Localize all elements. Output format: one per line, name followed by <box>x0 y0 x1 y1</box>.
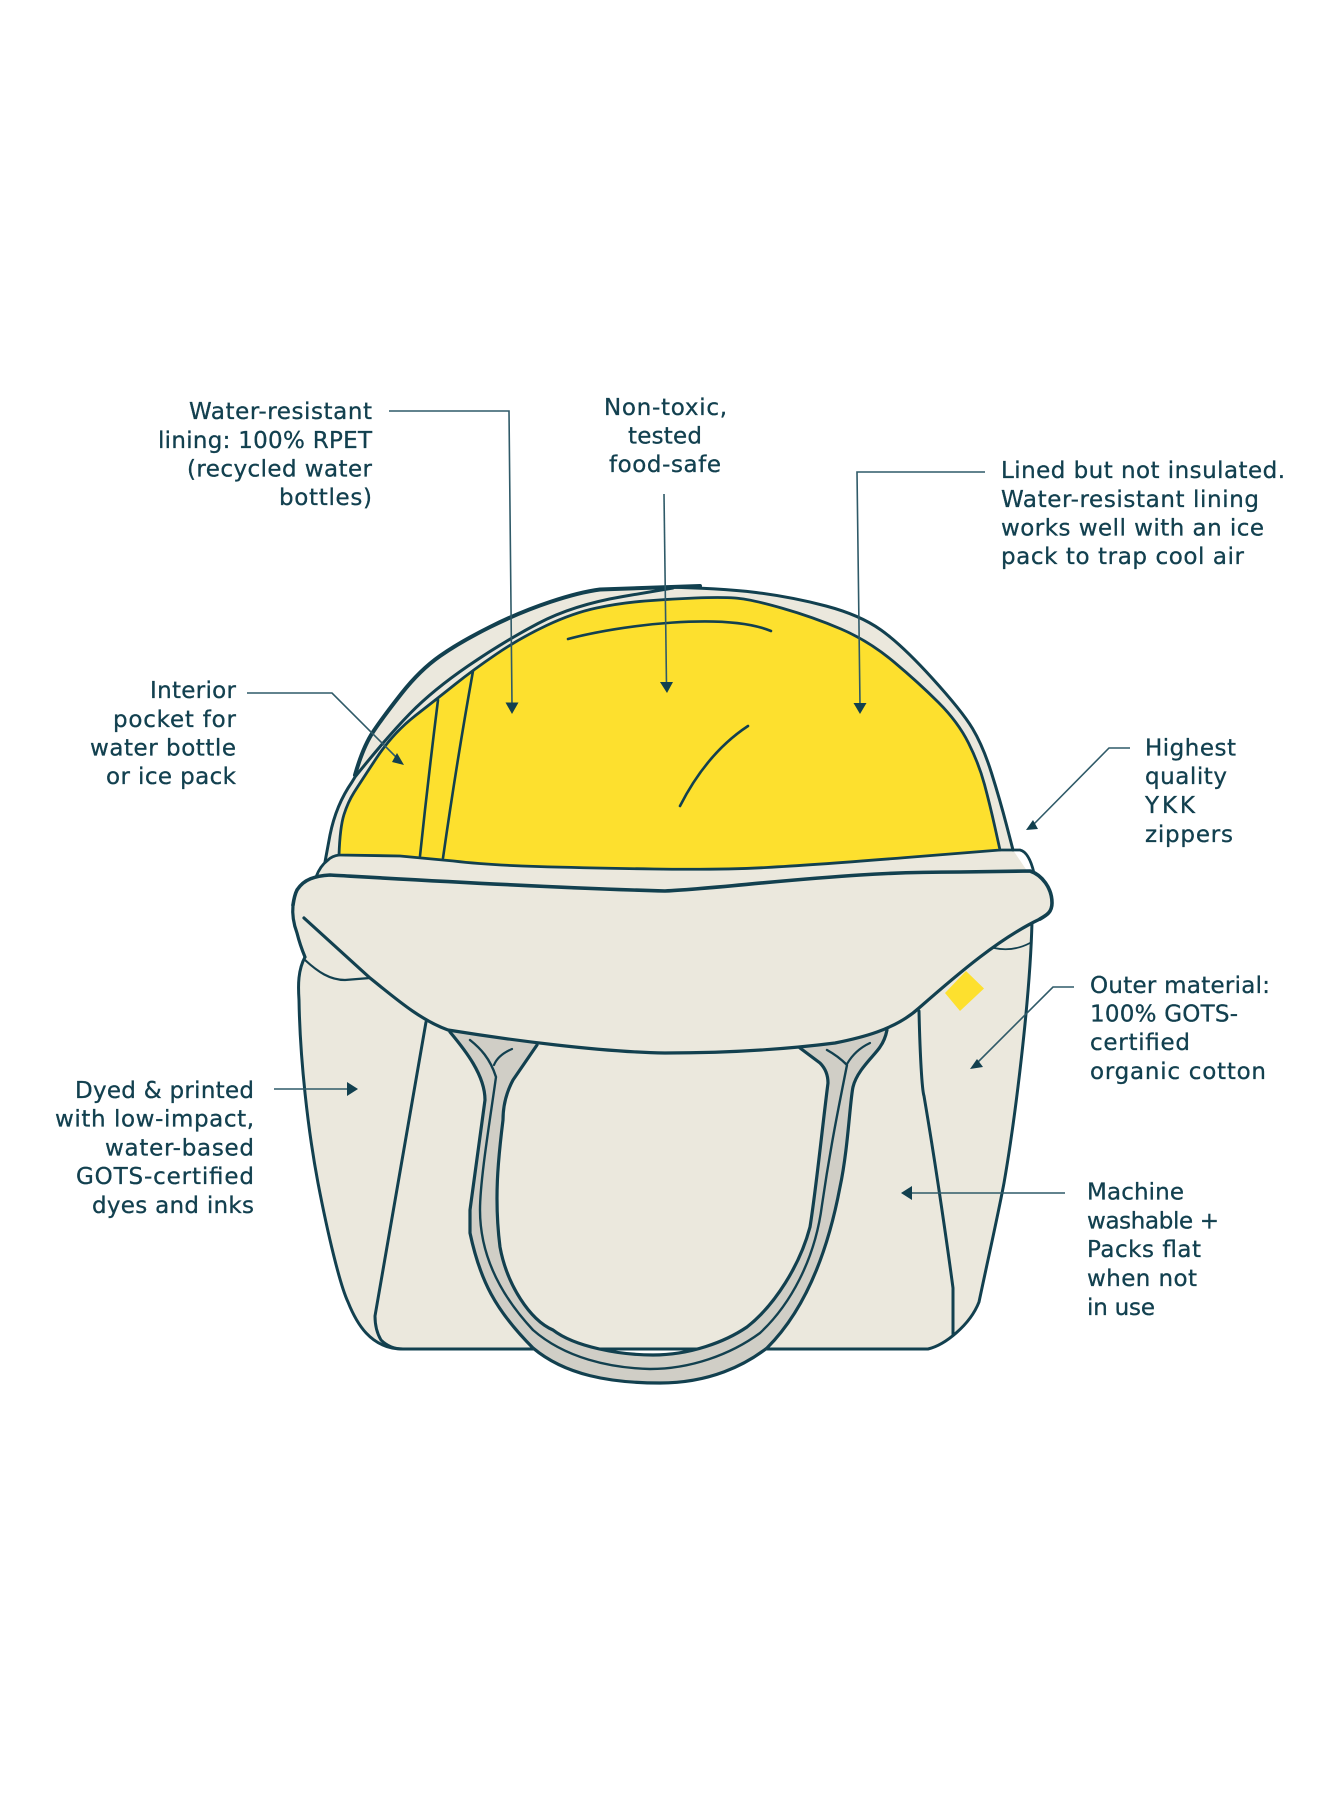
front flap <box>292 871 1052 1053</box>
callout: lined not insulated <box>854 458 1285 714</box>
callout: interior pocket: Interior <box>150 678 237 704</box>
callout: water-resistant lining: Water-resistant <box>189 399 372 425</box>
callout: machine washable: Packs flat <box>1087 1237 1201 1263</box>
callout: lined not insulated: Water-resistant lining <box>1001 487 1259 513</box>
zipper band <box>310 586 1040 890</box>
callout: water-resistant lining: bottles) <box>279 485 372 511</box>
callout: machine washable: Machine <box>1087 1180 1184 1206</box>
callout: YKK zippers <box>1026 736 1236 848</box>
callout: water-resistant lining <box>158 399 518 714</box>
side seams <box>375 1011 953 1349</box>
arrow: to lining right <box>854 472 985 714</box>
callout: interior pocket: or ice pack <box>106 764 237 790</box>
callout: food-safe: tested <box>628 424 702 450</box>
arrow: to outer fabric <box>970 987 1074 1069</box>
callout: outer material <box>970 973 1270 1085</box>
callout: outer material: organic cotton <box>1090 1059 1266 1085</box>
callout: water-resistant lining: (recycled water <box>187 456 373 482</box>
arrow: to bag front <box>901 1186 1065 1200</box>
callout: lined not insulated: Lined but not insulated. <box>1001 458 1285 484</box>
callout: machine washable: washable + <box>1087 1208 1219 1234</box>
callout: dyes and inks: dyes and inks <box>92 1193 254 1219</box>
arrow: to pocket <box>247 693 404 765</box>
callout: food-safe <box>604 395 727 693</box>
callout: dyes and inks <box>55 1078 358 1219</box>
callout: dyes and inks: GOTS-certified <box>76 1164 254 1190</box>
bag body <box>299 900 1032 1349</box>
yellow lining <box>339 598 1000 869</box>
callout: YKK zippers: zippers <box>1145 822 1233 848</box>
callout: dyes and inks: Dyed & printed <box>75 1078 254 1104</box>
callout: YKK zippers: Highest <box>1145 736 1236 762</box>
callout: YKK zippers: YKK <box>1144 793 1196 819</box>
callout: interior pocket <box>90 678 404 790</box>
callout: water-resistant lining: lining: 100% RPET <box>158 428 373 454</box>
callout: outer material: certified <box>1090 1030 1190 1056</box>
callout: food-safe: Non-toxic, <box>604 395 727 421</box>
callout: lined not insulated: works well with an ice <box>1001 516 1264 542</box>
callout: dyes and inks: water-based <box>105 1136 254 1162</box>
handle <box>450 1020 887 1383</box>
callout: machine washable: when not <box>1087 1266 1197 1292</box>
callout: interior pocket: water bottle <box>90 736 236 762</box>
bag opening strip edges <box>316 850 1034 877</box>
callout: interior pocket: pocket for <box>113 707 237 733</box>
arrow: to lining centre <box>660 494 673 693</box>
callout: lined not insulated: pack to trap cool air <box>1001 544 1245 570</box>
callout: machine washable: in use <box>1087 1295 1155 1321</box>
callout: outer material: 100% GOTS- <box>1090 1002 1238 1028</box>
interior pocket seams <box>420 671 473 858</box>
arrow: to bag side <box>274 1082 358 1096</box>
callout: machine washable <box>901 1180 1219 1321</box>
callout: dyes and inks: with low-impact, <box>55 1106 254 1132</box>
lining creases <box>568 621 771 806</box>
illustration: tote bag <box>292 586 1052 1383</box>
yellow tag <box>945 971 984 1011</box>
arrow: to lining <box>389 411 518 714</box>
callout: food-safe: food-safe <box>609 452 721 478</box>
arrow: to zipper <box>1026 748 1130 830</box>
callout: outer material: Outer material: <box>1090 973 1270 999</box>
callout: YKK zippers: quality <box>1145 764 1227 790</box>
